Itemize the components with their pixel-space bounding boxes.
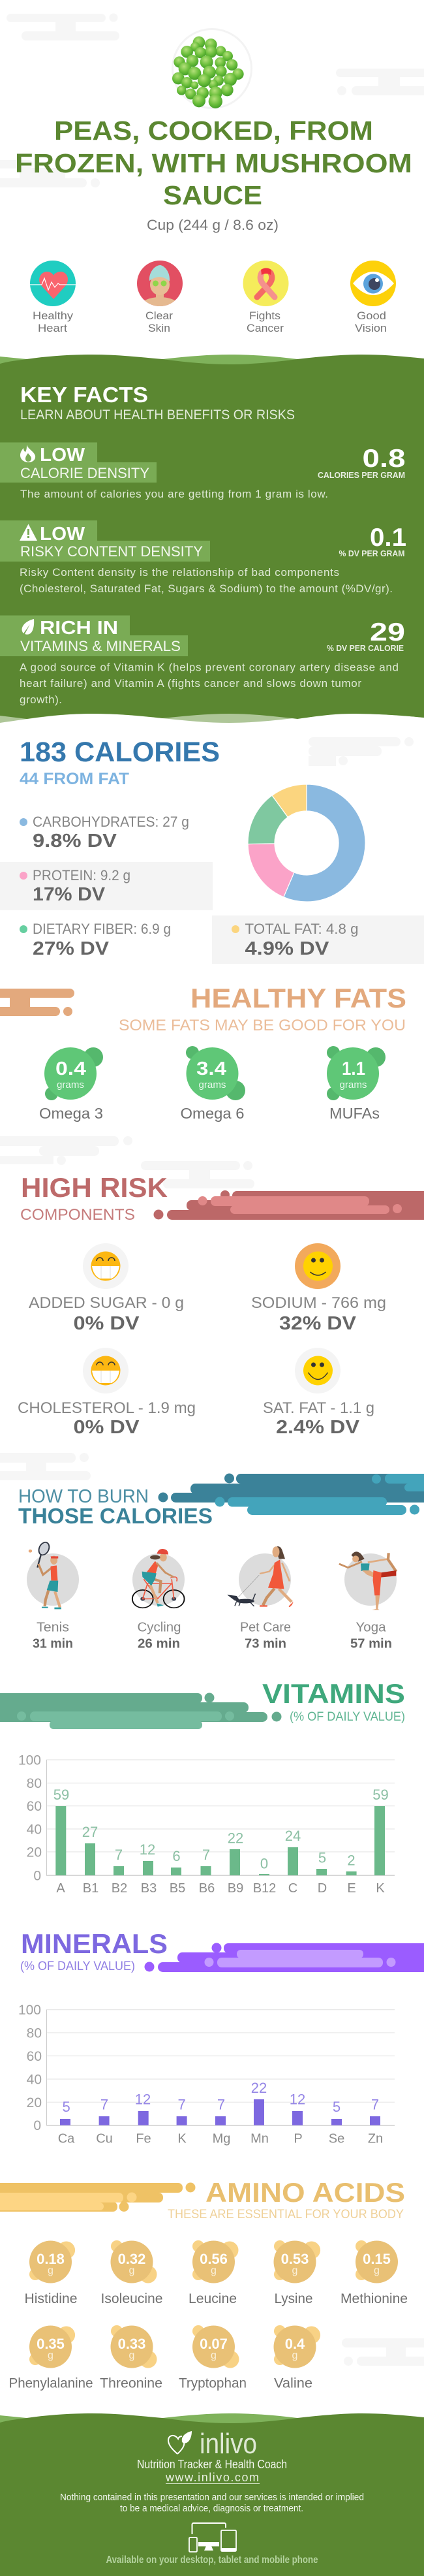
icon: yoga pose <box>339 1551 396 1610</box>
fact: rich in vitamins and minerals: % DV PER CALORIE <box>327 643 404 653</box>
icon: tennis player <box>29 1541 61 1609</box>
fact: calorie density: LOW <box>40 445 85 466</box>
amino: leucine: g <box>211 2265 217 2276</box>
bars <box>55 1806 385 1875</box>
risk: cholesterol: CHOLESTEROL - 1.9 mg <box>18 1399 196 1417</box>
amino: valine: 0.4 <box>285 2336 305 2352</box>
risk: added sugar: 0% DV <box>73 1313 140 1334</box>
amino: tryptophan <box>179 2325 247 2391</box>
icon: clear skin <box>137 261 183 306</box>
amino: isoleucine: Isoleucine <box>100 2291 163 2306</box>
y axis: 100 <box>18 2003 41 2018</box>
fat: mufas: MUFAs <box>329 1105 380 1122</box>
value labels: 7 <box>217 2097 225 2113</box>
fact: rich in vitamins and minerals: growth). <box>20 693 62 706</box>
label: fights cancer: Cancer <box>247 322 284 334</box>
heading: key facts <box>20 383 295 422</box>
fact: rich in vitamins and minerals: heart failure) and Vitamin A (fights cancer and slows down tumor <box>20 677 361 690</box>
value labels: 12 <box>135 2091 151 2108</box>
amino: lysine: 0.53 <box>281 2251 309 2267</box>
amino: valine <box>274 2325 320 2391</box>
category labels: D <box>318 1881 327 1896</box>
y axis: 0 <box>33 1869 41 1883</box>
activity: tennis <box>27 1541 79 1651</box>
icon: leaf <box>22 619 34 635</box>
fact: rich in vitamins and minerals: RICH IN <box>40 618 118 639</box>
value labels: 7 <box>177 2097 186 2113</box>
disclaimer <box>60 2492 364 2514</box>
bar chart: minerals <box>18 2003 395 2146</box>
amino: lysine: g <box>292 2265 297 2276</box>
heading: amino acids <box>168 2177 405 2221</box>
amino: histidine <box>25 2241 77 2306</box>
fat: omega 3: 0.4 <box>55 1058 86 1079</box>
icon: healthy heart <box>30 261 76 306</box>
category labels: Zn <box>368 2132 383 2146</box>
fat: omega 6: Omega 6 <box>180 1105 244 1122</box>
risk: sodium: SODIUM - 766 mg <box>251 1294 386 1312</box>
risk: cholesterol <box>18 1348 196 1438</box>
carbohydrates <box>20 814 189 851</box>
value labels: 12 <box>290 2091 305 2108</box>
heading: key facts: LEARN ABOUT HEALTH BENEFITS OR RISKS <box>20 407 295 422</box>
amino: threonine: g <box>129 2350 134 2361</box>
category labels: C <box>288 1881 297 1896</box>
label: healthy heart: Heart <box>38 322 67 334</box>
fat: omega 3: Omega 3 <box>39 1105 103 1122</box>
activity: yoga: 57 min <box>350 1636 392 1651</box>
amino: threonine <box>100 2325 162 2391</box>
y axis: 40 <box>27 1822 42 1837</box>
value labels: 7 <box>115 1847 123 1863</box>
amino: methionine: 0.15 <box>363 2251 391 2267</box>
y axis: 60 <box>27 2049 42 2064</box>
category labels: B2 <box>112 1881 127 1896</box>
value labels: 2 <box>347 1852 356 1869</box>
value labels: 27 <box>82 1824 98 1840</box>
macro list <box>0 814 424 964</box>
heading: amino acids: THESE ARE ESSENTIAL FOR YOUR BODY <box>168 2208 404 2221</box>
y axis <box>18 1753 42 1883</box>
label: healthy heart <box>33 310 74 334</box>
activity: tennis: 31 min <box>33 1636 73 1651</box>
activity: yoga: Yoga <box>356 1621 386 1635</box>
amino: leucine <box>189 2240 239 2306</box>
activity: pet care: Pet Care <box>240 1621 291 1635</box>
heading: how to burn those calories <box>18 1486 213 1528</box>
risk: sodium: 32% DV <box>279 1313 357 1334</box>
title <box>15 116 412 210</box>
section decoration: minerals <box>145 1943 424 1972</box>
icon: dog walker <box>229 1546 294 1607</box>
total fat <box>232 921 359 959</box>
heading: vitamins: VITAMINS <box>262 1678 405 1709</box>
icon: cyclist <box>132 1549 185 1608</box>
amino: methionine: Methionine <box>341 2291 408 2306</box>
heading: key facts: KEY FACTS <box>20 383 148 407</box>
fact: risky content density <box>0 520 406 595</box>
fact: rich in vitamins and minerals <box>0 615 405 706</box>
heading: minerals: MINERALS <box>21 1928 168 1959</box>
y axis: 40 <box>27 2073 42 2087</box>
value labels: 12 <box>140 1841 155 1858</box>
label: fights cancer <box>247 310 284 334</box>
category labels <box>56 1881 385 1896</box>
y axis: 60 <box>27 1799 42 1814</box>
icon: ribbon <box>243 261 288 306</box>
risk: added sugar <box>29 1243 184 1334</box>
risk: sodium <box>251 1243 386 1334</box>
heading: how to burn those calories: THOSE CALORIES <box>18 1504 213 1528</box>
heading: calories: 44 FROM FAT <box>20 770 129 788</box>
value labels <box>62 2080 379 2115</box>
amino: leucine: 0.56 <box>200 2251 228 2267</box>
carbohydrates: CARBOHYDRATES: 27 g <box>33 814 189 830</box>
category labels: A <box>56 1881 65 1896</box>
y axis: 0 <box>33 2118 41 2133</box>
amino: phenylalanine: g <box>48 2350 53 2361</box>
icon: smile face <box>303 1356 333 1386</box>
value labels: 5 <box>62 2099 70 2115</box>
fat: mufas: grams <box>339 1079 367 1090</box>
amino: methionine: g <box>374 2265 380 2276</box>
title: FROZEN, WITH MUSHROOM <box>15 148 412 178</box>
heading: vitamins: (% OF DAILY VALUE) <box>290 1710 405 1724</box>
dietary fiber <box>20 921 171 959</box>
value labels: 59 <box>53 1787 69 1803</box>
donut chart <box>248 784 365 902</box>
section decoration: burn calories <box>158 1473 424 1515</box>
value labels: 22 <box>228 1830 243 1847</box>
heading: high risk <box>20 1172 168 1224</box>
activity: pet care: 73 min <box>245 1636 286 1651</box>
label: good vision: Vision <box>355 322 387 334</box>
y axis: 80 <box>27 1776 42 1791</box>
fat: omega 3 <box>39 1047 103 1122</box>
label: good vision <box>355 310 387 334</box>
heading: minerals: (% OF DAILY VALUE) <box>20 1960 135 1973</box>
category labels: P <box>294 2132 303 2146</box>
title: SAUCE <box>163 180 262 210</box>
category labels: B3 <box>141 1881 157 1896</box>
bar chart: vitamins <box>18 1753 395 1896</box>
heading: amino acids: AMINO ACIDS <box>205 2177 405 2208</box>
category labels: K <box>177 2132 187 2146</box>
fat: mufas <box>327 1046 386 1122</box>
fact: calorie density <box>0 443 406 500</box>
heading: high risk: COMPONENTS <box>20 1206 135 1224</box>
food photo: peas <box>172 29 252 108</box>
risk: saturated fat <box>263 1348 374 1438</box>
total fat: 4.9% DV <box>245 938 329 959</box>
category labels: Se <box>329 2132 344 2146</box>
fact: rich in vitamins and minerals: A good source of Vitamin K (helps prevent coronary artery disease and <box>20 661 399 674</box>
y axis: 100 <box>18 1753 41 1768</box>
icon: smile face <box>303 1251 333 1281</box>
category labels: B9 <box>228 1881 243 1896</box>
amino: methionine <box>341 2240 408 2306</box>
dietary fiber: DIETARY FIBER: 6.9 g <box>33 921 171 937</box>
heading: healthy fats: SOME FATS MAY BE GOOD FOR YOU <box>119 1017 406 1034</box>
fat: mufas: 1.1 <box>342 1058 365 1079</box>
amino: valine: Valine <box>274 2376 312 2391</box>
activity: cycling: 26 min <box>138 1636 180 1651</box>
value labels <box>53 1787 389 1872</box>
value labels: 59 <box>372 1787 389 1803</box>
total fat: TOTAL FAT: 4.8 g <box>245 921 359 937</box>
value labels: 5 <box>318 1850 326 1866</box>
category labels: Ca <box>58 2132 75 2146</box>
risk: saturated fat: SAT. FAT - 1.1 g <box>263 1399 374 1417</box>
website: www.inlivo.com <box>165 2471 259 2484</box>
category labels: B1 <box>83 1881 98 1896</box>
value labels: 24 <box>285 1828 301 1844</box>
fact: rich in vitamins and minerals: 29 <box>370 618 405 646</box>
heading: calories <box>20 737 220 788</box>
value labels: 6 <box>172 1848 181 1864</box>
section decoration: high risk <box>154 1190 424 1220</box>
amino: tryptophan: 0.07 <box>200 2336 228 2352</box>
fact: risky content density: Risky Content density is the relationship of bad components <box>20 566 339 579</box>
activity: yoga <box>339 1551 397 1651</box>
fact: risky content density: 0.1 <box>370 524 406 552</box>
fat: omega 6: grams <box>198 1079 226 1090</box>
amino: isoleucine: 0.32 <box>118 2251 145 2267</box>
disclaimer: Nothing contained in this presentation and our services is intended or implied <box>60 2492 364 2503</box>
availability note: Available on your desktop, tablet and mobile phone <box>106 2554 318 2566</box>
bars <box>60 2099 380 2125</box>
heading: minerals <box>20 1928 168 1973</box>
category labels: E <box>347 1881 356 1896</box>
fact: calorie density: CALORIE DENSITY <box>20 465 149 481</box>
category labels: Mg <box>213 2132 230 2146</box>
icon: eye <box>350 261 396 306</box>
icon: devices <box>189 2523 236 2552</box>
amino: lysine <box>274 2240 320 2306</box>
heading: healthy fats: HEALTHY FATS <box>190 983 406 1013</box>
label: fights cancer: Fights <box>249 310 280 322</box>
dietary fiber: 27% DV <box>33 938 110 959</box>
activity: cycling: Cycling <box>137 1621 181 1635</box>
category labels: Cu <box>96 2132 113 2146</box>
protein <box>20 867 130 905</box>
fat: omega 6 <box>180 1046 245 1122</box>
fact: risky content density: (Cholesterol, Saturated Fat, Sugars & Sodium) to the amount (%DV/gr). <box>20 582 393 595</box>
serving size: Cup (244 g / 8.6 oz) <box>147 217 279 233</box>
fact: calorie density: The amount of calories you are getting from 1 gram is low. <box>20 488 328 500</box>
label: clear skin: Clear <box>145 310 173 322</box>
icon: warning <box>20 524 37 541</box>
fat: omega 3: grams <box>57 1079 84 1090</box>
amino: threonine: Threonine <box>100 2376 162 2391</box>
amino: phenylalanine <box>9 2326 93 2391</box>
carbohydrates: 9.8% DV <box>33 831 117 851</box>
category labels: B12 <box>253 1881 276 1896</box>
amino: phenylalanine: 0.35 <box>37 2336 65 2352</box>
icon: flame <box>20 445 35 462</box>
label: clear skin: Skin <box>148 322 170 334</box>
heading: healthy fats <box>119 983 406 1034</box>
category labels: K <box>376 1881 385 1896</box>
tagline: Nutrition Tracker & Health Coach <box>137 2458 287 2471</box>
heading: high risk: HIGH RISK <box>21 1172 168 1203</box>
category labels <box>58 2132 383 2146</box>
amino: phenylalanine: Phenylalanine <box>9 2376 93 2391</box>
amino: leucine: Leucine <box>189 2291 237 2306</box>
heading: calories: 183 CALORIES <box>20 737 220 768</box>
fact: rich in vitamins and minerals: VITAMINS & MINERALS <box>20 638 181 654</box>
value labels: 7 <box>202 1847 210 1863</box>
activity: tennis: Tenis <box>37 1621 69 1635</box>
category labels: Fe <box>136 2132 151 2146</box>
panel: key facts <box>0 355 424 723</box>
amino: isoleucine <box>100 2240 163 2306</box>
section decoration: vitamins <box>0 1693 282 1729</box>
icon: grin face <box>91 1251 120 1281</box>
category labels: Mn <box>250 2132 269 2146</box>
amino: tryptophan: g <box>211 2350 217 2361</box>
icon: grin face <box>91 1356 120 1386</box>
label: healthy heart: Healthy <box>33 310 74 322</box>
protein: 17% DV <box>33 884 106 905</box>
amino: histidine: g <box>48 2265 53 2276</box>
amino: histidine: 0.18 <box>37 2251 65 2267</box>
fat: omega 6: 3.4 <box>196 1058 226 1079</box>
fact: calorie density: CALORIES PER GRAM <box>318 470 405 480</box>
fact: risky content density: RISKY CONTENT DENSITY <box>20 543 203 560</box>
logo: inlivo <box>200 2428 257 2460</box>
risk: cholesterol: 0% DV <box>73 1417 140 1438</box>
fact: risky content density: LOW <box>40 524 85 545</box>
y axis: 20 <box>27 2095 42 2110</box>
y axis: 80 <box>27 2026 42 2041</box>
heading: vitamins <box>262 1678 405 1724</box>
value labels: 0 <box>260 1856 268 1872</box>
value labels: 7 <box>100 2097 108 2113</box>
risk: added sugar: ADDED SUGAR - 0 g <box>29 1294 184 1312</box>
amino: lysine: Lysine <box>274 2291 313 2306</box>
label: clear skin <box>145 310 173 334</box>
benefits row <box>30 261 396 334</box>
disclaimer: to be a medical advice, diagnosis or treatment. <box>120 2504 303 2514</box>
y axis: 20 <box>27 1845 42 1860</box>
activity: cycling <box>132 1549 185 1651</box>
section decoration: healthy fats <box>0 989 74 1016</box>
amino: threonine: 0.33 <box>118 2336 145 2352</box>
title: PEAS, COOKED, FROM <box>54 116 373 146</box>
panel: footer <box>0 2413 424 2576</box>
amino: isoleucine: g <box>129 2265 134 2276</box>
category labels: B5 <box>170 1881 185 1896</box>
value labels: 7 <box>371 2097 379 2113</box>
y axis <box>18 2003 42 2133</box>
fact: risky content density: % DV PER GRAM <box>339 549 404 558</box>
activity: pet care <box>229 1546 294 1651</box>
value labels: 22 <box>251 2080 267 2096</box>
amino: tryptophan: Tryptophan <box>179 2376 247 2391</box>
risk: saturated fat: 2.4% DV <box>276 1417 360 1438</box>
heading: how to burn those calories: HOW TO BURN <box>18 1486 149 1507</box>
fact: calorie density: 0.8 <box>363 445 406 473</box>
value labels: 5 <box>333 2099 341 2115</box>
logo <box>168 2428 257 2460</box>
protein: PROTEIN: 9.2 g <box>33 867 130 883</box>
label: good vision: Good <box>357 310 386 322</box>
category labels: B6 <box>199 1881 215 1896</box>
amino: histidine: Histidine <box>25 2291 77 2306</box>
section decoration: amino acids <box>0 2182 196 2212</box>
amino: valine: g <box>292 2350 297 2361</box>
